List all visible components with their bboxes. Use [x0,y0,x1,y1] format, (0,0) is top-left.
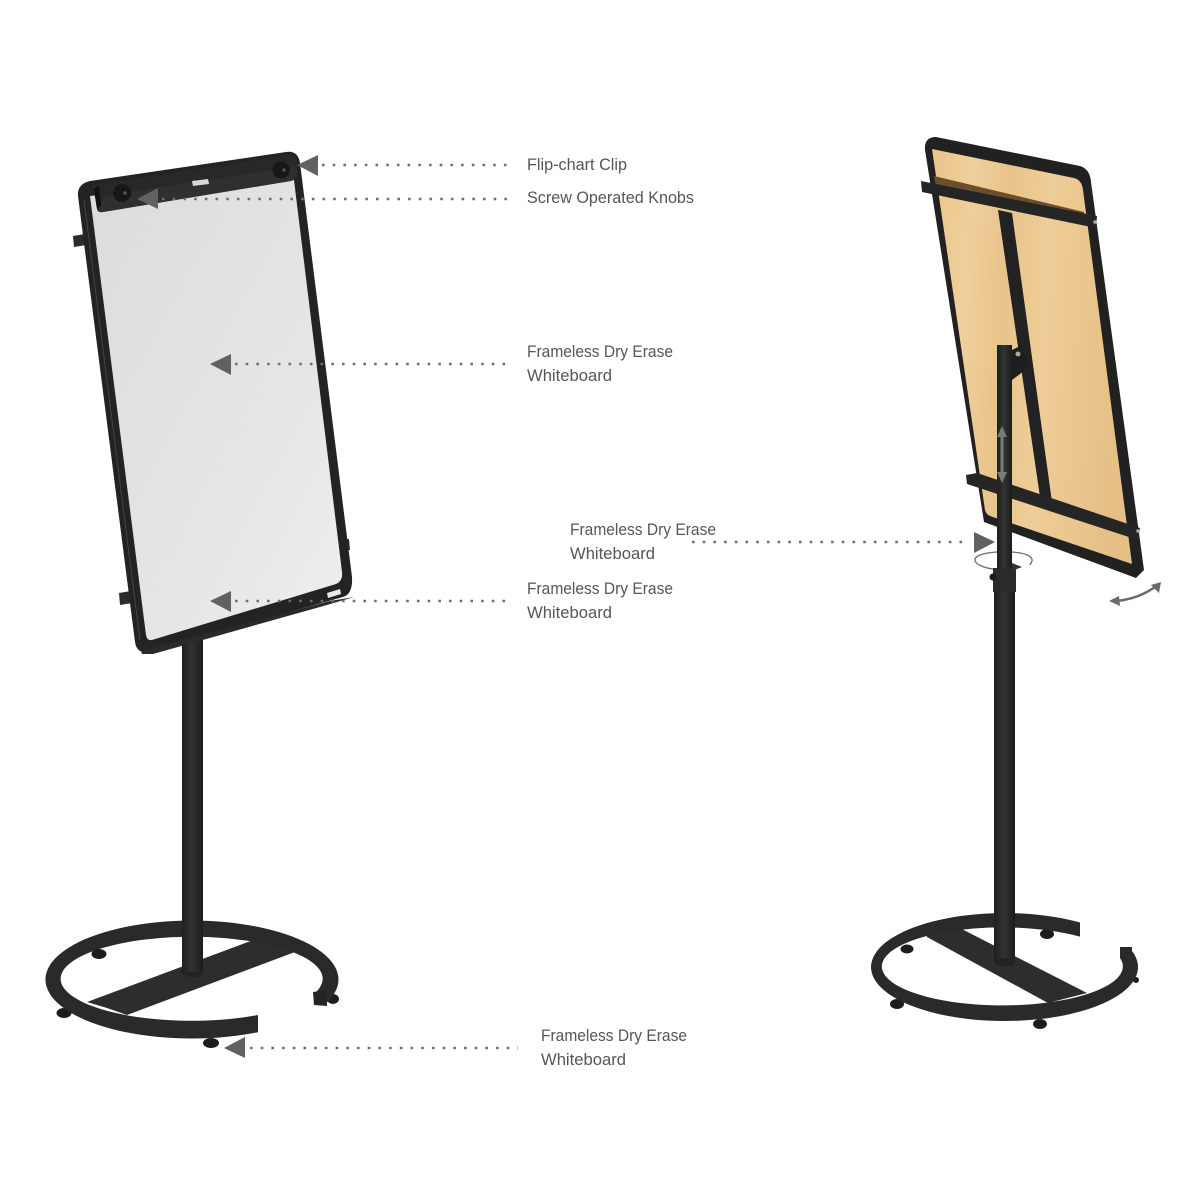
label: frameless whiteboard 3: Frameless Dry Erase [527,579,673,598]
pole collar on base [182,967,204,977]
right easel: rear view [871,137,1161,1029]
label: frameless whiteboard 1: Frameless Dry Erase [527,342,673,361]
side bracket lower [119,591,132,605]
callout: lower whiteboard arrow [210,591,510,612]
top clip bar [93,155,298,212]
clip bar shade [97,166,297,212]
pen tray [141,597,354,654]
label: frameless whiteboard 3 [527,579,673,622]
callout: whiteboard arrow [210,354,510,375]
label plate [327,589,341,598]
lower pole [994,590,1015,963]
knob left [113,184,131,202]
foot: right [1133,977,1139,983]
callout: base arrow [224,1037,518,1058]
top cross bar [921,181,1097,228]
knob right [272,162,290,178]
rotation arrow [975,552,1032,571]
pole front of ring [182,915,203,972]
foot: back left [900,944,914,954]
label: flip-chart clip: Flip-chart Clip [527,155,627,174]
board frame [78,152,352,652]
bottom cross bar [966,473,1140,540]
ring base [45,921,338,1039]
callout: right easel arrow [692,532,995,553]
label: frameless whiteboard 4 [541,1026,687,1069]
bracket bolt [1016,352,1020,356]
callout: flip-chart clip arrow [297,155,507,176]
left easel: front view [45,152,354,1048]
left clip end [94,186,101,209]
label: screw operated knobs: Screw Operated Knobs [527,188,694,207]
pole [182,635,203,975]
centre brace [998,210,1052,502]
label: frameless whiteboard 2 [570,520,716,563]
wood panel [932,149,1132,564]
bolt bottom bar [1136,529,1140,533]
foot: back left [92,949,106,959]
pole foot collar [994,958,1015,966]
crossbar [87,933,295,1015]
foot: front left [56,1008,72,1018]
label: frameless whiteboard 1: Whiteboard [527,366,612,385]
foot: front centre [203,1038,219,1048]
ring end block [313,990,327,1006]
bolt top bar [1093,220,1097,224]
brand plate [192,179,209,186]
crossbar [927,922,1087,1003]
ring base [871,913,1138,1021]
label: frameless whiteboard 2: Whiteboard [570,544,655,563]
height adjust arrow [997,426,1007,483]
foot: front centre [1033,1019,1047,1029]
pivot bracket [1012,345,1028,380]
locking knob [990,574,996,580]
foot: right [327,994,339,1004]
label: frameless whiteboard 4: Frameless Dry Erase [541,1026,687,1045]
label: frameless whiteboard 1 [527,342,673,385]
label: frameless whiteboard 3: Whiteboard [527,603,612,622]
top bar shadow [934,176,1085,218]
foot: front left [890,999,904,1009]
side bracket upper [73,234,86,247]
tilt arrow [1109,582,1161,606]
board frame rear [925,137,1144,578]
callout: knobs arrow [137,188,507,209]
label: frameless whiteboard 2: Frameless Dry Erase [570,520,716,539]
foot: back right [1040,929,1054,939]
side bracket right [345,539,350,550]
label: frameless whiteboard 4: Whiteboard [541,1050,626,1069]
height collar [993,568,1016,592]
upper pole [997,345,1012,569]
frame highlight rail [84,200,140,640]
bottom bar shadow [977,473,1128,528]
white board surface [90,172,342,640]
